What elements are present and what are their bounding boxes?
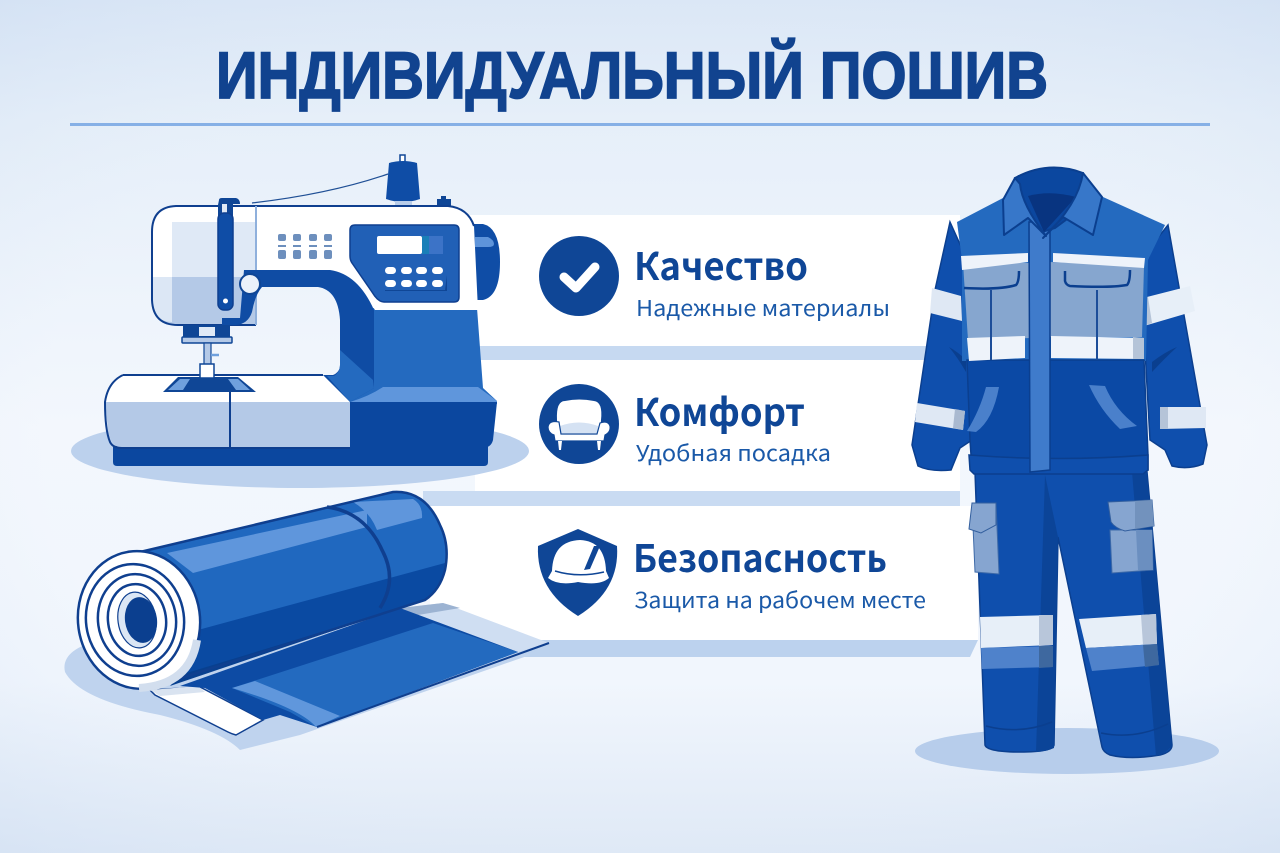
hip pockets — [967, 385, 1137, 432]
needle assembly — [182, 325, 232, 378]
panel: benefits — [423, 215, 978, 657]
panel: safety band — [430, 506, 978, 657]
suit shadow — [915, 728, 1219, 774]
needle bar — [218, 198, 260, 310]
machine head — [152, 206, 478, 325]
right cargo pocket — [1108, 500, 1154, 573]
roll cylinder — [140, 492, 447, 688]
machine shadow — [71, 414, 529, 488]
chest pockets — [964, 270, 1130, 289]
machine base — [105, 375, 497, 466]
heading: safety: Безопасность — [633, 528, 887, 583]
placket — [1029, 222, 1050, 472]
text: safety description: Защита на рабочем месте — [634, 583, 926, 615]
heading: comfort: Комфорт — [634, 382, 805, 437]
roll shadow — [64, 620, 530, 750]
collar — [1003, 168, 1102, 238]
text: comfort description: Удобная посадка — [636, 436, 831, 468]
panel: comfort band — [423, 360, 960, 506]
icon: sofa — [539, 384, 619, 464]
right sleeve — [1139, 225, 1207, 468]
control panel — [350, 225, 459, 302]
jacket body — [957, 168, 1165, 474]
machine arm — [222, 270, 374, 402]
thread spool — [252, 155, 451, 207]
trousers — [969, 472, 1172, 758]
text: quality description: Надежные материалы — [636, 291, 890, 323]
fabric roll — [64, 492, 549, 750]
icon: shield with helmet — [538, 529, 617, 616]
stitch selector buttons — [278, 234, 332, 259]
left cargo pocket — [969, 503, 999, 574]
roll end spiral — [69, 543, 209, 697]
unrolled fabric — [150, 603, 549, 735]
sewing machine — [71, 155, 529, 488]
panel: quality band — [470, 215, 960, 360]
right reflective stripes — [1079, 614, 1159, 671]
left reflective stripes — [980, 615, 1053, 669]
work suit — [912, 168, 1219, 774]
heading: quality: Качество — [634, 236, 808, 291]
jacket chest stripe — [961, 253, 1145, 270]
machine column — [350, 308, 497, 404]
icon: check mark — [539, 236, 619, 316]
hand wheel — [470, 224, 500, 300]
left sleeve — [912, 222, 972, 470]
jacket waist stripe — [967, 290, 1144, 361]
title: ИНДИВИДУАЛЬНЫЙ ПОШИВ — [216, 37, 1048, 112]
